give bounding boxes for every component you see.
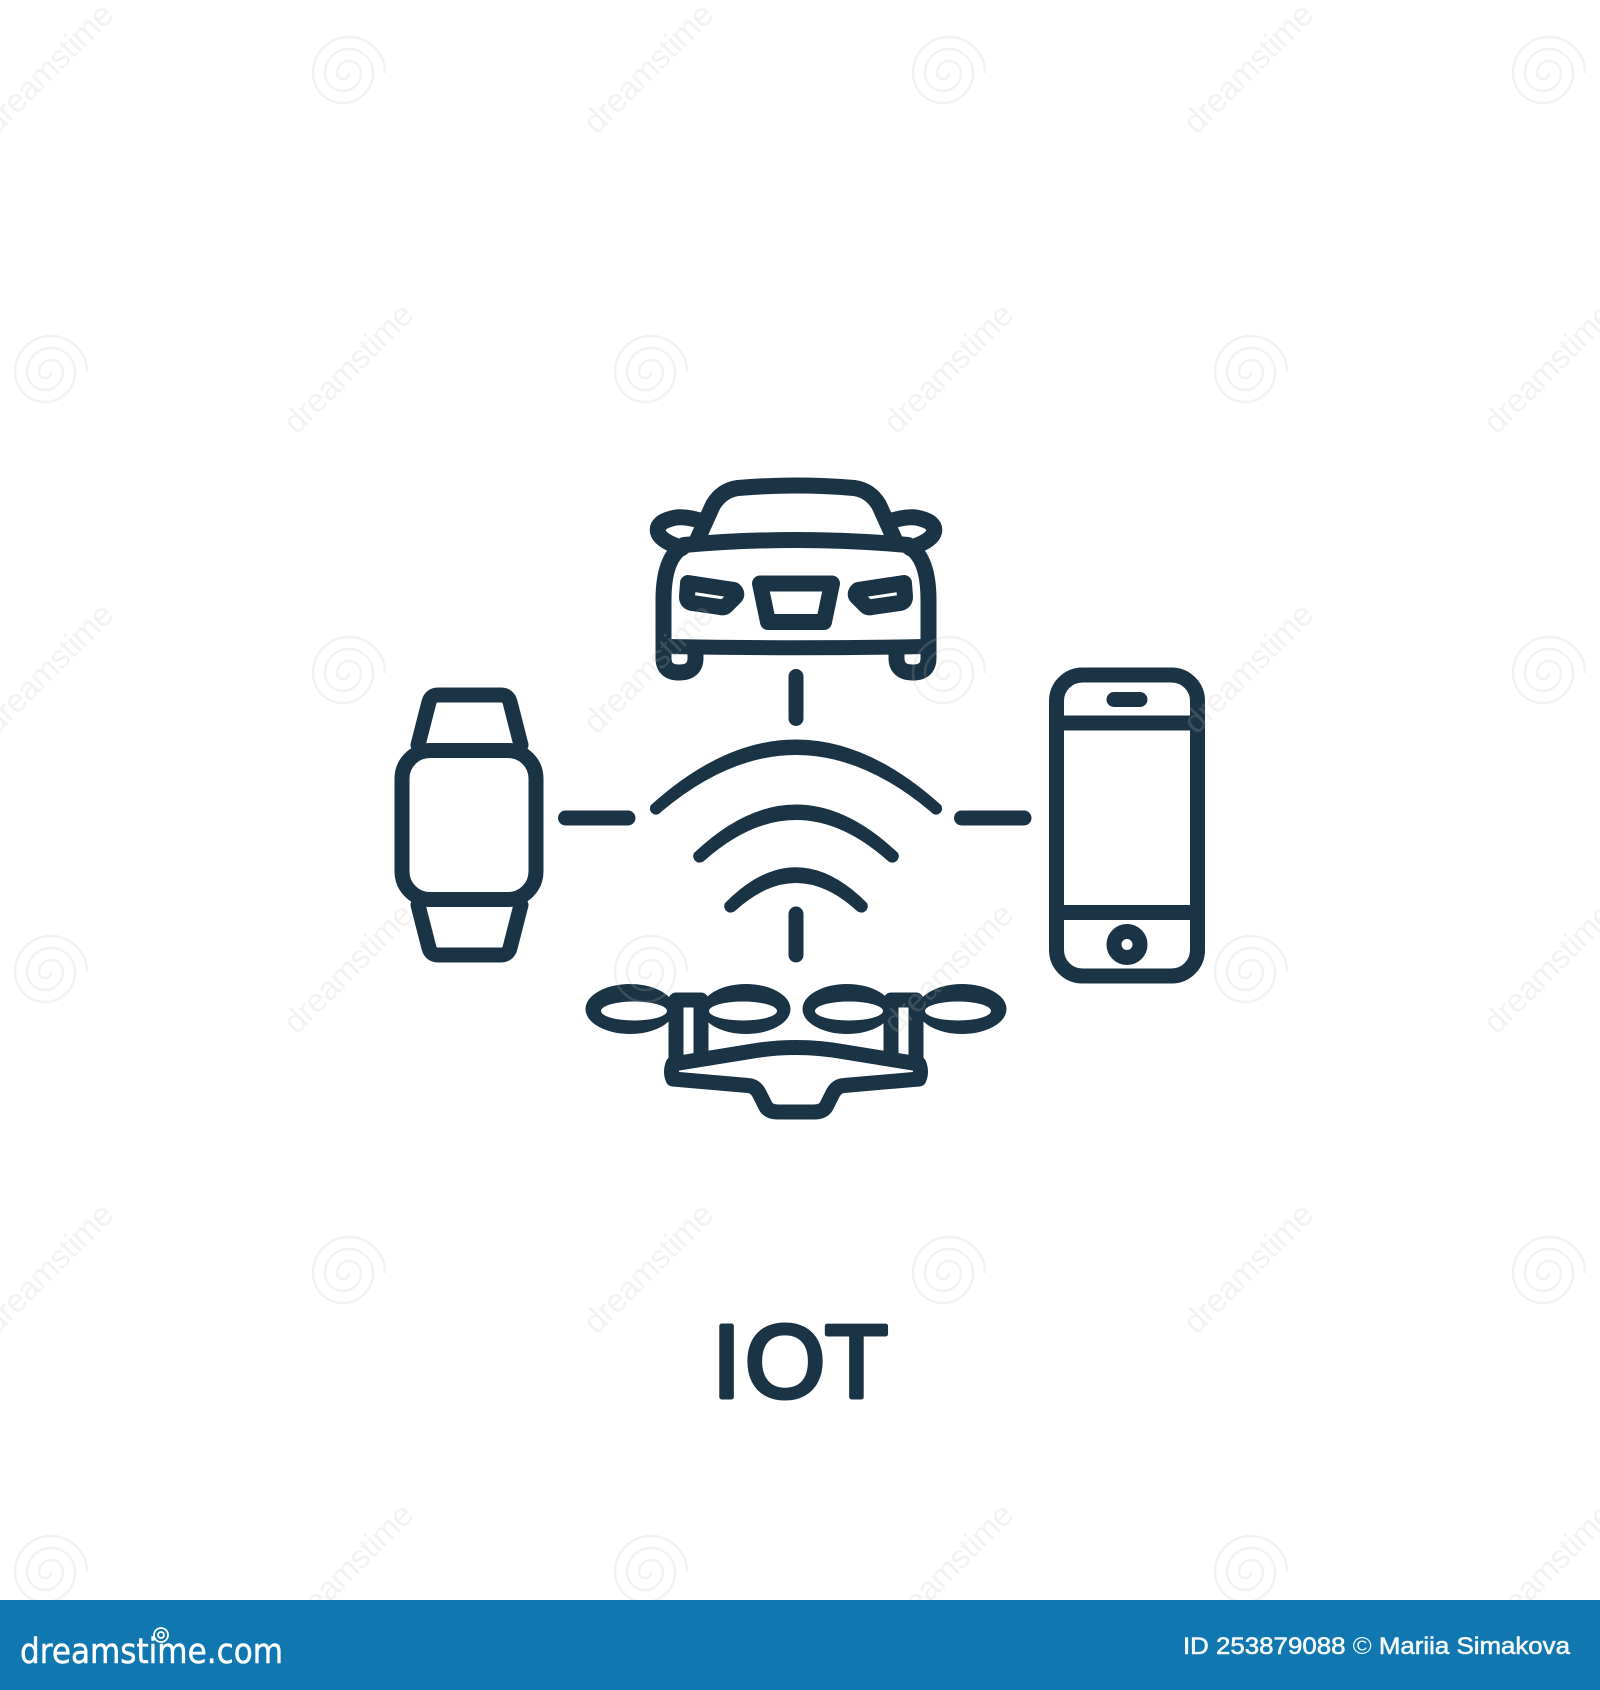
car bumper — [668, 646, 924, 648]
watch case — [402, 750, 536, 900]
car left headlight — [687, 583, 736, 607]
phone top bezel line — [1056, 716, 1198, 730]
drone right arm — [891, 1000, 916, 1064]
connector: car — [788, 676, 804, 718]
watermark pattern: dreamstime — [275, 895, 420, 1040]
car grille — [760, 584, 832, 622]
car left mirror — [658, 517, 698, 548]
icon: wifi signal arcs — [650, 740, 942, 913]
middle arc — [693, 804, 899, 863]
small arc — [724, 867, 868, 913]
phone bottom bezel line — [1056, 905, 1198, 920]
icon: drone — [586, 984, 1006, 1112]
car left wheel — [664, 630, 696, 672]
connector: phone — [962, 810, 1024, 826]
connector: watch — [566, 810, 628, 826]
drone body — [672, 1048, 920, 1112]
car hood line — [684, 540, 908, 545]
icon: smartphone — [1056, 675, 1198, 976]
car body — [664, 545, 928, 650]
phone home button — [1114, 932, 1140, 958]
watermark pattern: dreamstime — [575, 1195, 720, 1340]
car right wheel — [896, 630, 928, 672]
large arc — [650, 740, 942, 815]
drone left arm — [676, 1000, 701, 1064]
watermark pattern: dreamstime — [1175, 595, 1320, 740]
car right headlight — [856, 583, 905, 607]
footer logo text: dreamstime.com — [20, 1632, 283, 1672]
connector: drone — [788, 914, 804, 955]
icon: smartwatch — [402, 695, 536, 955]
watermark pattern: dreamstime — [275, 295, 420, 440]
footer credit text: ID 253879088 © Mariia Simakova — [1183, 1633, 1570, 1660]
car windshield — [698, 486, 894, 538]
watch top strap — [418, 695, 521, 745]
phone frame — [1056, 675, 1198, 976]
icon: logo spiral — [154, 1628, 168, 1642]
icon: car — [658, 486, 934, 672]
phone speaker — [1114, 692, 1140, 707]
watch bottom strap — [418, 905, 521, 955]
watermark pattern: dreamstime — [875, 295, 1020, 440]
watermark pattern: dreamstime — [875, 895, 1020, 1040]
watermark pattern: dreamstime — [275, 1495, 420, 1640]
watermark pattern: dreamstime — [575, 595, 720, 740]
car right mirror — [894, 517, 934, 548]
connector lines — [566, 676, 1024, 955]
title: IOT: IOT — [712, 1304, 888, 1419]
drone propellers — [586, 984, 1006, 1034]
watermark pattern: dreamstime — [875, 1495, 1020, 1640]
footer bar — [0, 1600, 1600, 1690]
watermark pattern: dreamstime — [1175, 1195, 1320, 1340]
